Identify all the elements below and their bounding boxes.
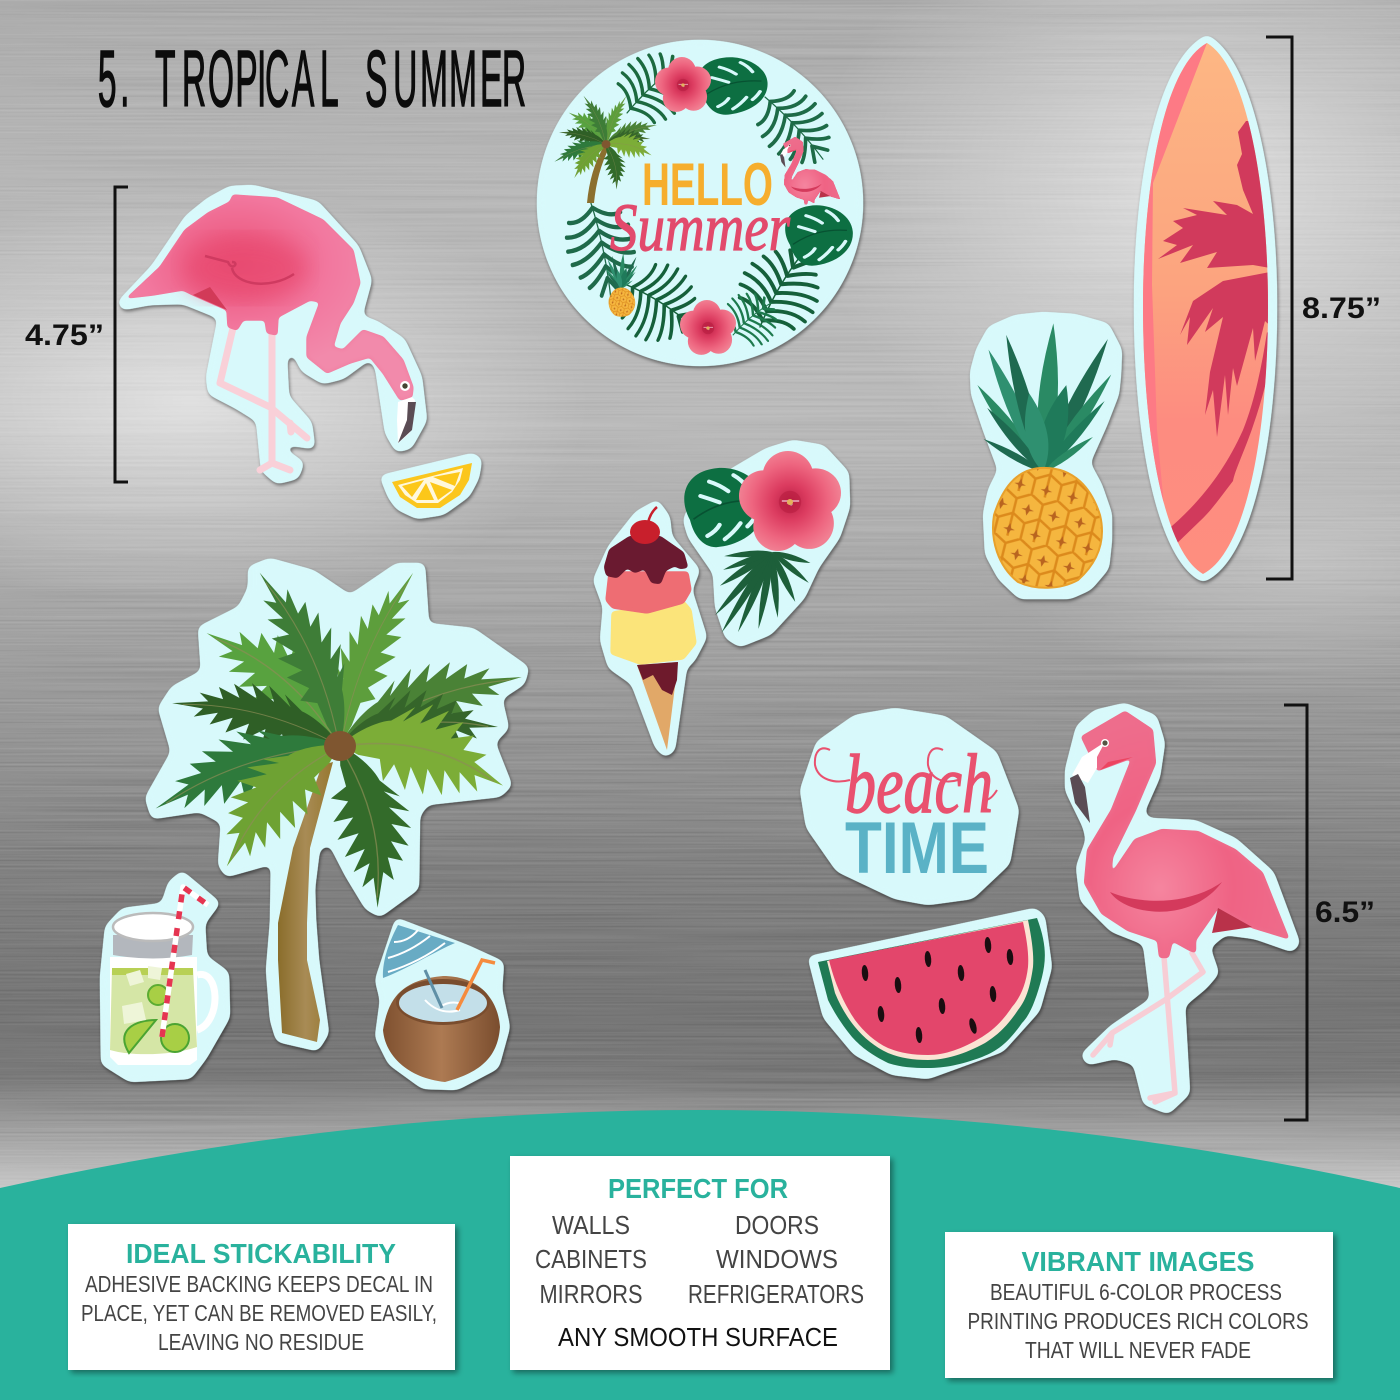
- sticker: mason jar: [102, 873, 228, 1080]
- body text: [81, 1271, 437, 1355]
- lime slices: [124, 985, 189, 1053]
- teal footer band: [0, 1110, 1400, 1400]
- wreath ferns: [558, 37, 853, 357]
- lid: [113, 913, 193, 958]
- small palm: [550, 91, 659, 203]
- hibiscus: [739, 451, 841, 551]
- sticker: coconut drink: [377, 920, 508, 1088]
- umbrella stick: [425, 970, 442, 1008]
- wing marks: [205, 256, 294, 284]
- title: 5. TROPICAL SUMMER: [98, 34, 526, 124]
- pineapple fruit: [973, 323, 1116, 588]
- heading: IDEAL STICKABILITY: [126, 1238, 396, 1269]
- watercolor wash: [183, 236, 307, 300]
- legs: [220, 328, 307, 470]
- surface list: CABINETS: [535, 1244, 647, 1274]
- body text: [968, 1279, 1308, 1363]
- sticker: lemon slice: [382, 455, 480, 517]
- small pineapple: [604, 253, 638, 317]
- TIME lettering: TIME: [845, 808, 989, 889]
- chocolate: [605, 537, 687, 583]
- sticker: ice cream: [595, 502, 705, 755]
- body text: THAT WILL NEVER FADE: [1025, 1337, 1251, 1363]
- sticker: flamingo top left: [120, 187, 425, 482]
- body text: BEAUTIFUL 6-COLOR PROCESS: [990, 1279, 1282, 1305]
- sticker: pineapple: [972, 314, 1120, 597]
- water: [396, 979, 490, 1025]
- orange straw: [457, 960, 495, 1010]
- monstera leaf: [684, 468, 765, 547]
- measurement: 4.75 inches: [25, 187, 128, 482]
- cherry: [630, 507, 660, 544]
- umbrella: [383, 925, 455, 978]
- panel: ideal stickability: [68, 1224, 455, 1370]
- cone: [637, 662, 678, 750]
- legs: [1093, 953, 1203, 1102]
- eye: [400, 381, 410, 391]
- body text: LEAVING NO RESIDUE: [158, 1329, 364, 1355]
- lemonade: [110, 968, 197, 1054]
- surface list: WINDOWS: [716, 1244, 838, 1274]
- pink rim: [1143, 43, 1207, 503]
- measurement: 8.75 inches: [1266, 37, 1381, 579]
- surface list: [535, 1210, 864, 1309]
- body text: PRINTING PRODUCES RICH COLORS: [968, 1308, 1308, 1334]
- panel: perfect for: [510, 1156, 890, 1370]
- surface list: MIRRORS: [540, 1279, 642, 1309]
- board: [1143, 43, 1268, 574]
- panel: vibrant images: [945, 1232, 1333, 1378]
- palm leaf: [712, 549, 811, 634]
- measurement: 8.75 inches: 8.75”: [1302, 292, 1381, 325]
- coconut shell: [383, 976, 500, 1082]
- sticker: palm tree: [140, 554, 529, 1049]
- small flamingo: [780, 137, 840, 204]
- sticker: hibiscus and leaves: [684, 442, 848, 645]
- sticker: flamingo right: [1067, 705, 1298, 1112]
- jar glass: [110, 957, 197, 1065]
- sticker: surfboard: [1130, 30, 1280, 590]
- HELLO lettering: HELLO: [642, 151, 773, 218]
- seeds: [861, 937, 1014, 1043]
- measurement: 6.5 inches: 6.5”: [1315, 896, 1375, 929]
- palm fronds: [140, 554, 529, 913]
- rind: [818, 918, 1045, 1068]
- trunk: [278, 762, 333, 1042]
- body text: PLACE, YET CAN BE REMOVED EASILY,: [81, 1300, 437, 1326]
- surface list: WALLS: [552, 1210, 630, 1240]
- straw: [162, 887, 208, 1037]
- sticker: hello summer wreath: [539, 37, 861, 364]
- Summer lettering: Summer: [610, 189, 790, 265]
- sticker: watermelon: [810, 910, 1050, 1077]
- heading: VIBRANT IMAGES: [1022, 1246, 1254, 1277]
- surface list: DOORS: [735, 1210, 819, 1240]
- measurement: 6.5 inches: [1284, 705, 1375, 1120]
- measurement: 4.75 inches: 4.75”: [25, 319, 104, 352]
- any smooth surface: ANY SMOOTH SURFACE: [558, 1322, 838, 1352]
- sticker: beach time: [802, 710, 1017, 903]
- ice cubes: [122, 966, 162, 1024]
- beak: [397, 397, 415, 443]
- palm silhouette: [1158, 121, 1275, 550]
- beach lettering: beach: [845, 738, 993, 831]
- body, head and beak: [1070, 712, 1288, 957]
- flesh: [829, 922, 1028, 1055]
- pink scoop: [607, 573, 690, 612]
- body text: ADHESIVE BACKING KEEPS DECAL IN: [85, 1271, 433, 1297]
- heading: PERFECT FOR: [608, 1173, 788, 1204]
- beach swashes: [815, 748, 997, 800]
- body: [127, 195, 413, 400]
- yellow scoop: [612, 602, 695, 663]
- surface list: REFRIGERATORS: [688, 1279, 864, 1309]
